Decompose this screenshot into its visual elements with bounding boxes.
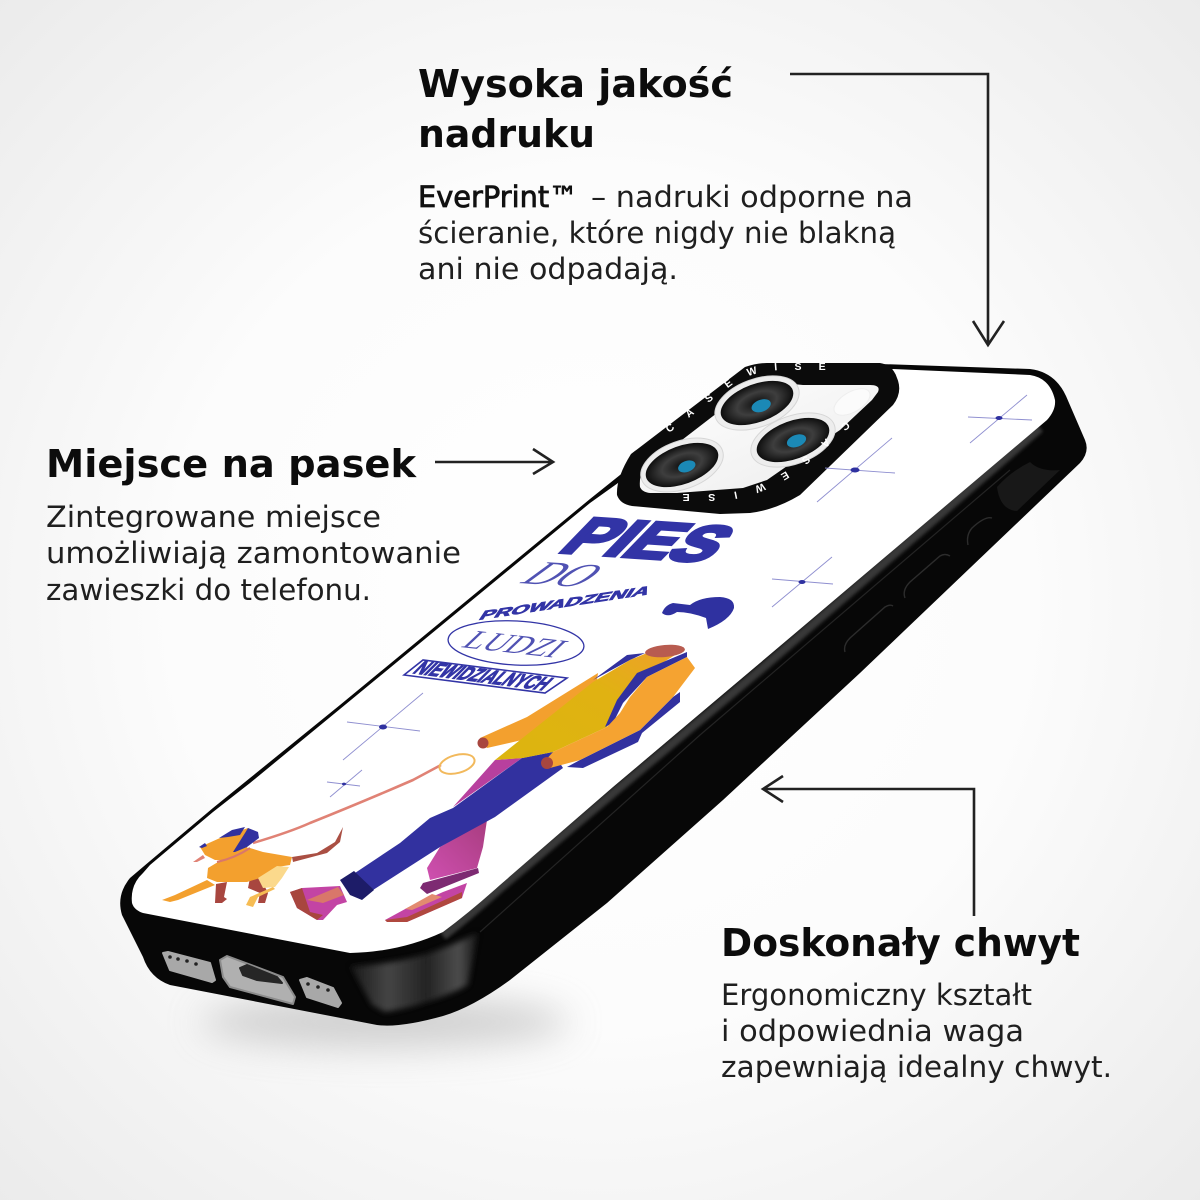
back leg <box>427 820 487 880</box>
arrow: print quality <box>790 74 1004 345</box>
bevel sheen <box>443 428 1040 936</box>
flash <box>830 383 874 421</box>
front arm <box>543 657 695 768</box>
speaker holes <box>168 955 330 992</box>
ear, cap and nose <box>199 827 259 852</box>
body line 3: zawieszki do telefonu. <box>46 573 371 607</box>
body line 2: umożliwiają zamontowanie <box>46 536 461 570</box>
DO: DO <box>508 555 618 594</box>
front trouser cuff <box>340 871 374 900</box>
paw <box>246 887 275 907</box>
EverPrint label: EverPrint™ <box>418 180 578 214</box>
print: flying hat <box>662 597 734 629</box>
head <box>200 828 257 860</box>
body line 3: ani nie odpadają. <box>418 252 678 286</box>
PROWADZENIA: PROWADZENIA <box>476 583 654 623</box>
left lens <box>633 428 731 502</box>
brown legs <box>215 877 268 903</box>
collar <box>217 848 250 862</box>
right lens <box>743 402 843 478</box>
front trouser leg <box>355 752 563 890</box>
case body <box>120 363 1087 1026</box>
ring lettering bottom: CASEWISE <box>683 422 850 501</box>
PIES: PIES <box>546 508 750 573</box>
side groove <box>480 470 1010 932</box>
tail <box>292 827 343 862</box>
corner highlight <box>350 932 478 1012</box>
left shoe <box>290 886 347 920</box>
blue backpack <box>567 692 680 768</box>
blue shoulder <box>593 653 645 680</box>
port: left speaker <box>163 952 215 982</box>
heading: Miejsce na pasek <box>46 442 417 486</box>
callout: grip <box>721 921 1112 1084</box>
oval badge LUDZI: LUDZI <box>454 626 575 663</box>
arrow: strap slot <box>435 449 553 474</box>
top lens <box>707 365 807 441</box>
print: lettering <box>404 508 750 695</box>
arrow: grip <box>763 776 974 916</box>
port: usb <box>220 956 295 1004</box>
ring lettering top: CASEWISE <box>666 363 826 432</box>
heading: Doskonały chwyt <box>721 921 1080 965</box>
body line 1: – nadruki odporne na <box>591 180 913 214</box>
callout: print quality <box>418 62 913 286</box>
body line 3: zapewniają idealny chwyt. <box>721 1050 1112 1084</box>
body line 2: ścieranie, które nigdy nie blakną <box>418 216 896 250</box>
strap slot <box>997 462 1060 511</box>
banner NIEWIDZIALNYCH: NIEWIDZIALNYCH <box>408 658 558 695</box>
hand cuffs <box>478 738 553 769</box>
port: right speaker <box>300 978 341 1007</box>
tongue <box>193 855 205 862</box>
print: walking figure <box>290 643 695 922</box>
back trouser cuff <box>420 868 479 894</box>
print: leash <box>253 751 477 843</box>
camera ring <box>617 363 899 514</box>
blue stripe <box>605 652 687 727</box>
body <box>207 848 292 882</box>
back arm <box>480 673 598 748</box>
heading: Wysoka jakość <box>418 62 733 106</box>
camera module <box>616 363 900 514</box>
side buttons <box>845 518 992 652</box>
print: sparkles <box>327 395 1032 797</box>
body line 1: Ergonomiczny kształt <box>721 978 1032 1012</box>
body line 1: Zintegrowane miejsce <box>46 500 381 534</box>
camera glass <box>640 384 879 493</box>
hip <box>258 866 289 888</box>
screen surface <box>132 369 1055 953</box>
print: dog <box>162 827 343 907</box>
extended leg <box>162 880 215 902</box>
phone case <box>120 363 1087 1026</box>
torso <box>495 650 683 760</box>
right shoe <box>385 883 467 922</box>
body line 2: i odpowiednia waga <box>721 1014 1024 1048</box>
callout: strap slot <box>46 442 461 607</box>
phone shadow <box>200 996 570 1048</box>
heading second line: nadruku <box>418 112 595 156</box>
oval badge LUDZI <box>447 617 585 669</box>
neck <box>645 643 685 659</box>
